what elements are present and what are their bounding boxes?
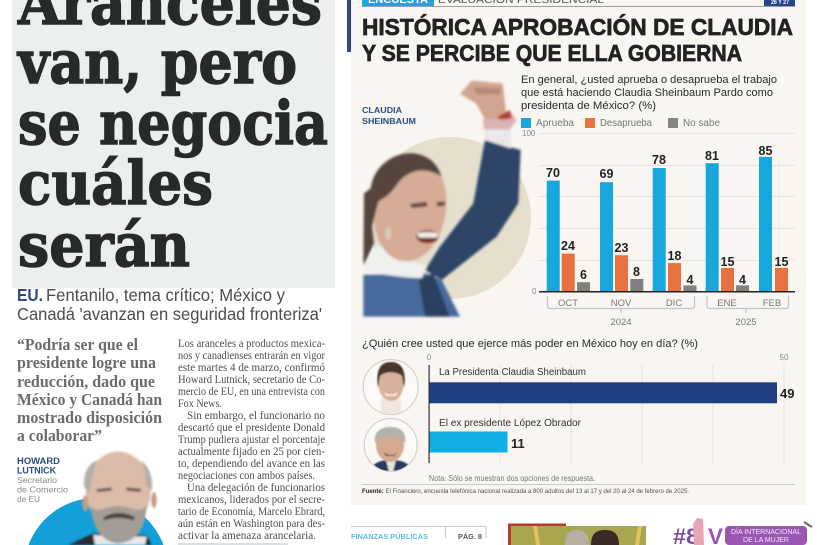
survey title: HISTÓRICA APROBACIÓN DE CLAUDIA <box>362 13 793 40</box>
power question: ¿Quién cree usted que ejerce más poder en México hoy en día? (%) <box>362 338 698 350</box>
bar chart: approval by month: 4 <box>739 273 746 287</box>
article body text: aún están en Washington para des- <box>178 518 325 530</box>
bar chart: approval by month: 2025 <box>735 317 757 328</box>
rule <box>362 484 795 485</box>
caption: Howard Lutnick: Secretario <box>17 475 57 485</box>
article body text: Sin embargo, el funcionario no <box>187 410 325 422</box>
bar chart: who holds power <box>427 353 794 464</box>
headline: van, pero <box>16 28 297 98</box>
legend: No sabe <box>683 117 720 129</box>
note: Nota: Sólo se muestran dos opciones de respuesta. <box>429 474 595 483</box>
bar chart: approval by month: 8 <box>633 265 640 279</box>
accent bar <box>347 0 351 52</box>
section reference: finanzas públicas: FINANZAS PÚBLICAS <box>351 532 428 541</box>
caption: Claudia Sheinbaum: SHEINBAUM <box>362 116 416 126</box>
caption: Howard Lutnick: de Comercio <box>17 484 68 494</box>
bar chart: approval by month: DIC <box>666 298 682 309</box>
bar chart: who holds power: La Presidenta Claudia Sheinbaum <box>439 367 586 378</box>
bar chart: who holds power: 11 <box>511 436 525 451</box>
caption: Howard Lutnick <box>17 456 68 504</box>
caption: Howard Lutnick: HOWARD <box>17 456 61 466</box>
approval question: En general, ¿usted aprueba o desaprueba el trabajo <box>521 74 777 86</box>
logo: 8M Día Internacional de la Mujer <box>673 518 812 545</box>
article body text <box>178 338 326 542</box>
bar chart: who holds power: 49 <box>780 386 794 401</box>
article body text: mercio de EU, en una entrevista con <box>178 386 325 398</box>
subheading <box>17 285 322 324</box>
survey title: Y SE PERCIBE QUE ELLA GOBIERNA <box>362 40 742 66</box>
article body text: nos y canadienses entrarán en vigor <box>178 350 325 362</box>
pull quote: México y Canadá han <box>17 390 162 409</box>
article body text: Los aranceles a productos mexica- <box>178 338 325 350</box>
section reference: finanzas públicas <box>351 526 486 541</box>
pull quote: reducción, dado que <box>17 372 155 391</box>
article body text: tario de Economía, Marcelo Ebrard, <box>178 506 325 518</box>
bar chart: approval by month: 23 <box>615 241 628 255</box>
approval question <box>521 74 777 112</box>
subheading: EU. <box>17 285 43 305</box>
bar chart: approval by month: 70 <box>546 166 560 180</box>
caption: Claudia Sheinbaum <box>362 105 416 126</box>
portrait: Howard Lutnick <box>28 452 164 545</box>
article body text: mexicanos, liderados por el secre- <box>178 494 325 506</box>
article body text: Fox News. <box>178 398 222 410</box>
approval question: presidenta de México? (%) <box>521 100 656 112</box>
caption: Claudia Sheinbaum: CLAUDIA <box>362 105 402 115</box>
headline <box>16 0 328 281</box>
bar chart: approval by month: 85 <box>759 144 772 158</box>
pull quote: mostrado disposición <box>17 408 162 427</box>
source: Fuente: El Financiero, encuesta telefónica nacional realizada a 800 adultos del 13 al 17 y del 20 al 24 de febrero de 2025. <box>362 488 689 495</box>
headline: cuáles <box>18 149 213 219</box>
article body text: este martes 4 de marzo, confirmó <box>178 362 325 374</box>
article body text: Trump pudiera ajustar el porcentaje <box>178 434 325 446</box>
bar chart: approval by month: 6 <box>580 268 587 282</box>
legend: Desaprueba <box>600 117 652 129</box>
subheading: Fentanilo, tema crítico; México y <box>46 285 285 305</box>
portrait: Claudia Sheinbaum with raised fist <box>363 81 531 317</box>
logo: 8M Día Internacional de la Mujer: DE LA MUJER <box>743 537 789 544</box>
marker: faint continuation line <box>178 543 288 545</box>
article body text: descartó que el presidente Donald <box>178 422 325 434</box>
bar chart: approval by month: NOV <box>611 298 632 309</box>
bar chart: approval by month: 15 <box>775 255 788 269</box>
news photo teaser <box>508 524 646 545</box>
bar chart: approval by month: 18 <box>668 249 681 263</box>
section header <box>362 0 795 7</box>
portrait: López Obrador circle <box>364 418 417 472</box>
bar chart: approval by month <box>522 129 795 328</box>
bar chart: approval by month: 100 <box>522 129 536 138</box>
article body text: actualmente fijado en 25 por cien- <box>178 446 325 458</box>
headline: serán <box>18 211 190 281</box>
bar chart: approval by month: ENE <box>717 298 737 309</box>
portrait: Sheinbaum circle <box>363 360 418 414</box>
logo: 8M Día Internacional de la Mujer: DÍA INTERNACIONAL <box>731 527 801 536</box>
headline: se negocia <box>18 89 328 159</box>
bar chart: approval by month: OCT <box>558 298 578 309</box>
subheading: Canadá 'avanzan en seguridad fronteriza' <box>17 304 322 324</box>
article body text: Una delegación de funcionarios <box>187 482 326 494</box>
article body text: to, dependiendo del avance en las <box>178 458 326 470</box>
bar chart: approval by month: 4 <box>687 273 694 287</box>
panel: survey background <box>351 0 806 505</box>
legend: Aprueba <box>536 117 574 129</box>
panel: headline background <box>12 0 335 288</box>
article body text: Howard Lutnick, secretario de Co- <box>178 374 325 386</box>
bar chart: who holds power: El ex presidente López Obrador <box>439 418 582 429</box>
bar chart: approval by month: 0 <box>532 287 537 296</box>
article body text: negociaciones con ambos países. <box>178 470 315 482</box>
bar chart: approval by month: 15 <box>721 255 734 269</box>
caption: Howard Lutnick: LUTNICK <box>17 466 56 476</box>
bar chart: approval by month: FEB <box>763 298 781 309</box>
pull quote: a colaborar” <box>17 426 102 445</box>
section reference: finanzas públicas: PÁG. 8 <box>458 532 482 541</box>
legend <box>521 117 720 129</box>
survey title <box>362 13 793 66</box>
bar chart: approval by month: 69 <box>600 167 613 181</box>
bar chart: approval by month: 24 <box>561 239 575 253</box>
bar chart: approval by month: 2024 <box>610 317 632 328</box>
bar chart: who holds power: 0 <box>427 353 432 362</box>
pull quote: “Podría ser que el <box>17 335 138 354</box>
section header: 26 Y 27 <box>771 0 790 6</box>
pull quote: presidente logre una <box>17 353 156 372</box>
approval question: que está haciendo Claudia Sheinbaum Pardo como <box>521 87 773 99</box>
article body text: activar la amenaza arancelaria. <box>178 530 316 542</box>
bar chart: approval by month: 81 <box>705 149 719 163</box>
bar chart: approval by month: 78 <box>652 153 666 167</box>
pull quote <box>17 335 162 445</box>
bar chart: who holds power: 50 <box>780 353 789 362</box>
caption: Howard Lutnick: de EU <box>17 494 40 504</box>
